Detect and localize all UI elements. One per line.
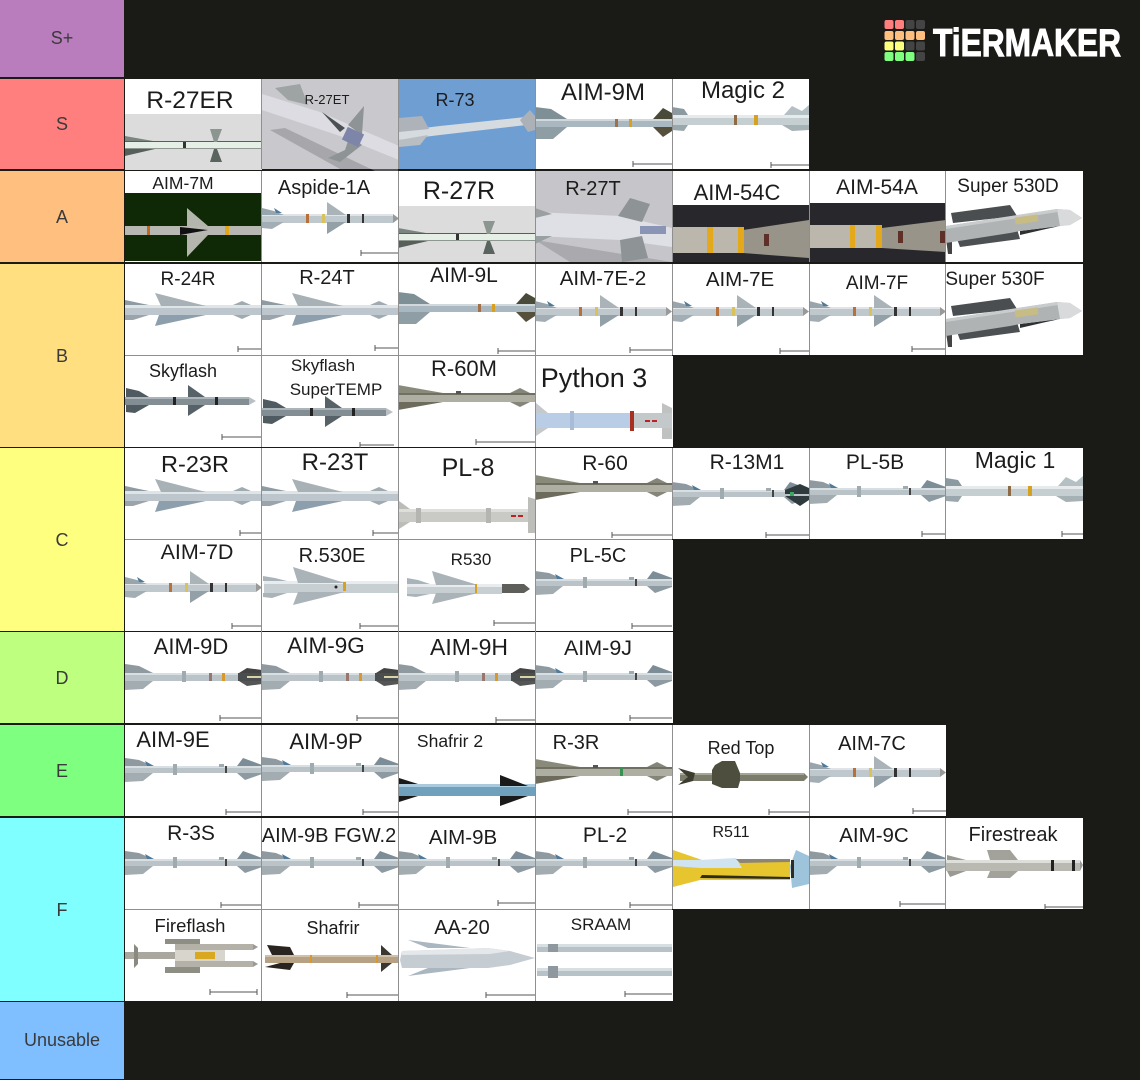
tile: PL-8: PL-8 <box>442 454 494 482</box>
tier label: F <box>0 818 124 1001</box>
tier label: A <box>0 171 124 262</box>
tile: R-27ET <box>262 79 399 182</box>
tile: AIM-7E: AIM-7E <box>706 268 774 291</box>
tile: AIM-9D <box>125 632 262 723</box>
tile: AIM-7C <box>809 725 946 816</box>
tile: R530: R530 <box>451 550 491 569</box>
tile: AIM-9G: AIM-9G <box>287 633 365 658</box>
tile: Shafrir: Shafrir <box>306 918 360 938</box>
tile: R-24R: R-24R <box>161 269 215 290</box>
tile: AIM-9D: AIM-9D <box>154 634 228 659</box>
tier label: B: B <box>56 346 68 366</box>
tile: AIM-9M: AIM-9M <box>561 79 645 106</box>
tile: AIM-54A: AIM-54A <box>836 176 918 199</box>
tile: Skyflash: Skyflash <box>149 361 217 381</box>
tier label: B <box>0 264 124 447</box>
tile: Aspide-1A <box>262 171 399 262</box>
tile: R-24R <box>125 264 262 355</box>
tile: Red Top: Red Top <box>708 738 774 758</box>
tile: R-24T: R-24T <box>299 267 355 289</box>
tile: AIM-9H: AIM-9H <box>430 634 508 660</box>
tile: AIM-9B FGW.2 <box>262 818 399 909</box>
tile: AIM-7E-2: AIM-7E-2 <box>560 267 646 290</box>
tier row: Unusable: Unusable <box>24 1030 100 1050</box>
tile: AIM-7M <box>125 171 262 262</box>
tile: R-23T: R-23T <box>302 449 369 476</box>
tile: AIM-9M <box>535 79 673 169</box>
tile: AIM-9C <box>809 818 946 909</box>
tier row: E <box>0 725 946 816</box>
tile: PL-2: PL-2 <box>583 824 627 847</box>
tile: R-23T <box>262 448 399 539</box>
tier row: F <box>0 818 1083 1001</box>
tile: Firestreak <box>946 818 1083 910</box>
tile: PL-5C: PL-5C <box>570 545 626 567</box>
tile: Skyflash SuperTEMP: Skyflash <box>291 356 355 375</box>
tile: R-23R: R-23R <box>161 451 229 477</box>
tile: R-24T <box>262 264 399 355</box>
tile: Fireflash <box>125 910 262 1001</box>
tier label: A: A <box>56 207 68 227</box>
tile: Python 3: Python 3 <box>541 363 647 393</box>
tile: AIM-7D <box>125 540 262 631</box>
tile: Super 530D: Super 530D <box>957 176 1059 197</box>
tile: Shafrir 2 <box>399 725 536 816</box>
tier row: S <box>0 77 809 182</box>
tile: AIM-9L <box>398 264 536 355</box>
tile: AIM-7D: AIM-7D <box>161 540 233 564</box>
tier row: Unusable <box>0 1002 124 1079</box>
tile: SRAAM <box>536 910 673 1001</box>
tile: Python 3 <box>536 356 673 447</box>
tier row: S+: S+ <box>51 28 73 48</box>
tile: AIM-7M: AIM-7M <box>152 173 214 193</box>
tier row: C <box>0 447 1083 631</box>
tile: AIM-7F: AIM-7F <box>846 273 908 294</box>
tile: AIM-7E <box>672 264 810 355</box>
tile: R-27T <box>535 171 672 262</box>
tile: R-3S: R-3S <box>167 822 215 845</box>
tile: R-60M <box>398 356 536 447</box>
tile: Magic 1 <box>946 447 1083 539</box>
tile: Fireflash: Fireflash <box>155 915 225 936</box>
tile: AIM-7E-2 <box>535 264 673 355</box>
tile: Super 530F: Super 530F <box>945 269 1045 290</box>
tile: R-27ER: R-27ER <box>146 87 234 114</box>
tier row: S+ <box>0 0 124 77</box>
tile: PL-2 <box>535 818 673 909</box>
tile: Super 530F <box>945 264 1083 355</box>
tile: R530 <box>399 540 536 631</box>
tile: AIM-9B: AIM-9B <box>429 826 497 849</box>
tile: Firestreak: Firestreak <box>969 824 1058 846</box>
tile: Aspide-1A: Aspide-1A <box>278 177 371 199</box>
tile: Magic 2: Magic 2 <box>701 77 785 104</box>
tile: AIM-54C <box>672 171 809 262</box>
tile: R-60M: R-60M <box>431 356 497 381</box>
tile: R-60 <box>535 448 673 539</box>
tile: SRAAM: SRAAM <box>571 915 631 934</box>
tier label: C: C <box>56 530 68 550</box>
tile: AA-20: AA-20 <box>434 917 490 939</box>
tile: R.530E <box>262 540 399 631</box>
tile: R-27R <box>398 171 535 262</box>
tier label: D <box>0 632 124 723</box>
tier label: F: F <box>56 900 68 920</box>
tile: Skyflash SuperTEMP <box>262 356 399 448</box>
tile: AIM-9B FGW.2: AIM-9B FGW.2 <box>262 825 396 847</box>
tier row: B <box>0 264 1083 448</box>
tile: PL-8 <box>399 448 536 539</box>
tile: AIM-9C: AIM-9C <box>839 824 909 847</box>
tile: AIM-9E <box>125 725 262 816</box>
tile: R511: R511 <box>712 824 750 841</box>
tier row: D <box>0 632 673 723</box>
tile: Red Top <box>673 725 810 816</box>
tile: AIM-9B <box>398 818 536 909</box>
tile: AA-20 <box>399 910 536 1001</box>
tier label: S: S <box>56 114 68 134</box>
tile: AIM-9L: AIM-9L <box>430 264 498 287</box>
tile: AIM-54C: AIM-54C <box>694 180 781 205</box>
tile: R-13M1 <box>672 448 810 539</box>
tile: R-3S <box>125 818 262 909</box>
tile: PL-5B: PL-5B <box>846 451 904 474</box>
tile: Super 530D <box>946 171 1083 262</box>
tile: Skyflash <box>125 356 262 447</box>
tile: Shafrir <box>262 910 399 1001</box>
tile: Shafrir 2: Shafrir 2 <box>417 731 483 751</box>
tile: AIM-9J: AIM-9J <box>564 636 632 660</box>
tier label: C <box>0 448 124 631</box>
tier label: D: D <box>56 668 68 688</box>
tile: AIM-9P <box>262 725 399 816</box>
tile: Skyflash SuperTEMP: SuperTEMP <box>290 380 382 399</box>
tile: PL-5B <box>809 448 946 539</box>
tile: AIM-7C: AIM-7C <box>838 733 906 755</box>
tile: AIM-9J <box>535 632 673 723</box>
tile: R-27ET: R-27ET <box>305 92 349 107</box>
tile: R-13M1: R-13M1 <box>710 451 784 474</box>
tile: R-27T: R-27T <box>565 178 621 200</box>
tile: R-3R: R-3R <box>553 732 599 754</box>
tile: R.530E: R.530E <box>299 545 365 567</box>
tier label: S <box>0 79 124 169</box>
tile: R-27R: R-27R <box>423 177 495 205</box>
tile: Magic 2 <box>672 77 809 169</box>
tile: AIM-7F <box>809 264 946 355</box>
tile: R-73: R-73 <box>435 90 475 110</box>
tile: AIM-9P: AIM-9P <box>289 729 363 754</box>
tile: R-60: R-60 <box>582 452 628 475</box>
tier label: E: E <box>56 761 68 781</box>
tile: R-73 <box>399 79 536 169</box>
tile: AIM-9E: AIM-9E <box>136 727 210 752</box>
tier row: A <box>0 171 1083 262</box>
tile: AIM-54A <box>809 171 946 262</box>
tile: R-27ER <box>125 79 262 170</box>
tile: R-3R <box>535 725 673 816</box>
tile: AIM-9H <box>398 632 536 723</box>
tile: Magic 1: Magic 1 <box>975 447 1055 473</box>
tile: AIM-9G <box>262 632 399 723</box>
tile: R511 <box>673 818 810 909</box>
tile: R-23R <box>125 448 262 539</box>
tile: PL-5C <box>535 540 673 631</box>
tier label: E <box>0 725 124 816</box>
